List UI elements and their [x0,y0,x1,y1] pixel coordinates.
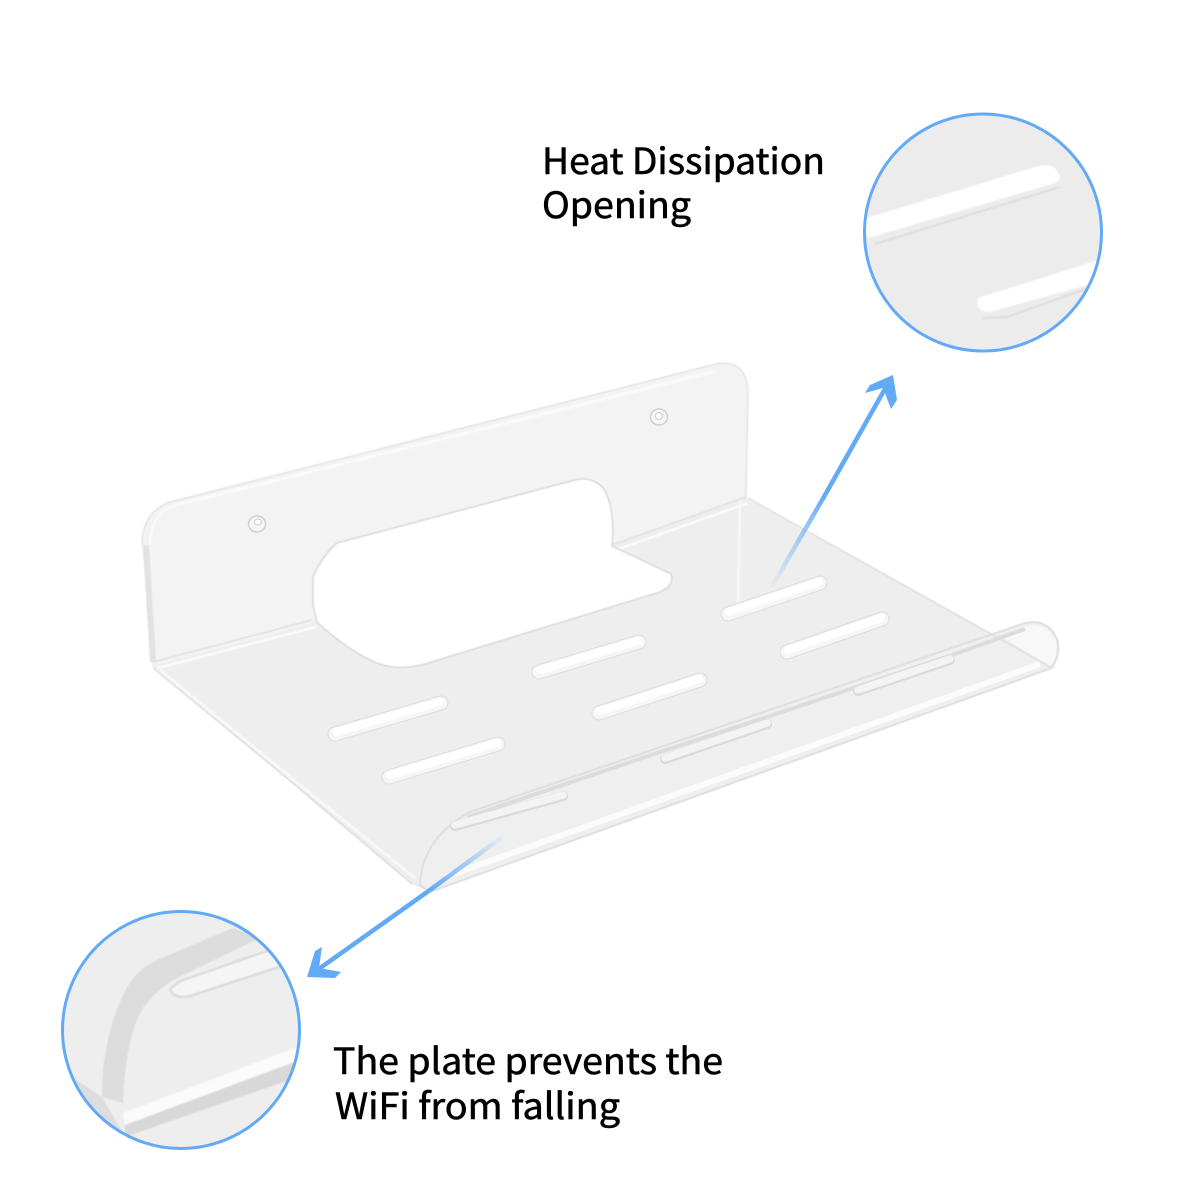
arrow: to heat dissipation detail [770,375,897,590]
heading: heat dissipation opening: Opening [542,177,691,229]
clear triangle where lip extends past floor [1004,625,1056,666]
heading: heat dissipation opening: Heat Dissipation [542,133,825,185]
shelf floor [152,498,1052,892]
mounting hole left [248,516,266,532]
mounting hole right [650,409,668,425]
heading: plate prevents falling: WiFi from falling [335,1078,620,1130]
heat dissipation slots on floor [335,582,882,777]
slots seen through lip [455,659,950,826]
acrylic wall shelf [142,363,1058,892]
heading: plate prevents falling [333,1033,723,1130]
lip top edge shading [468,629,1025,817]
plate edges and bevels [142,363,1058,892]
lip bottom highlight [445,664,1040,877]
arrow: to retaining plate detail [307,835,505,978]
heading: heat dissipation opening [542,133,825,229]
callout circle: front plate [60,912,300,1150]
heading: plate prevents falling: The plate prevents the [333,1033,723,1085]
callout circle: heat dissipation opening [860,114,1105,351]
front retaining lip [420,622,1058,892]
back plate [142,363,748,666]
